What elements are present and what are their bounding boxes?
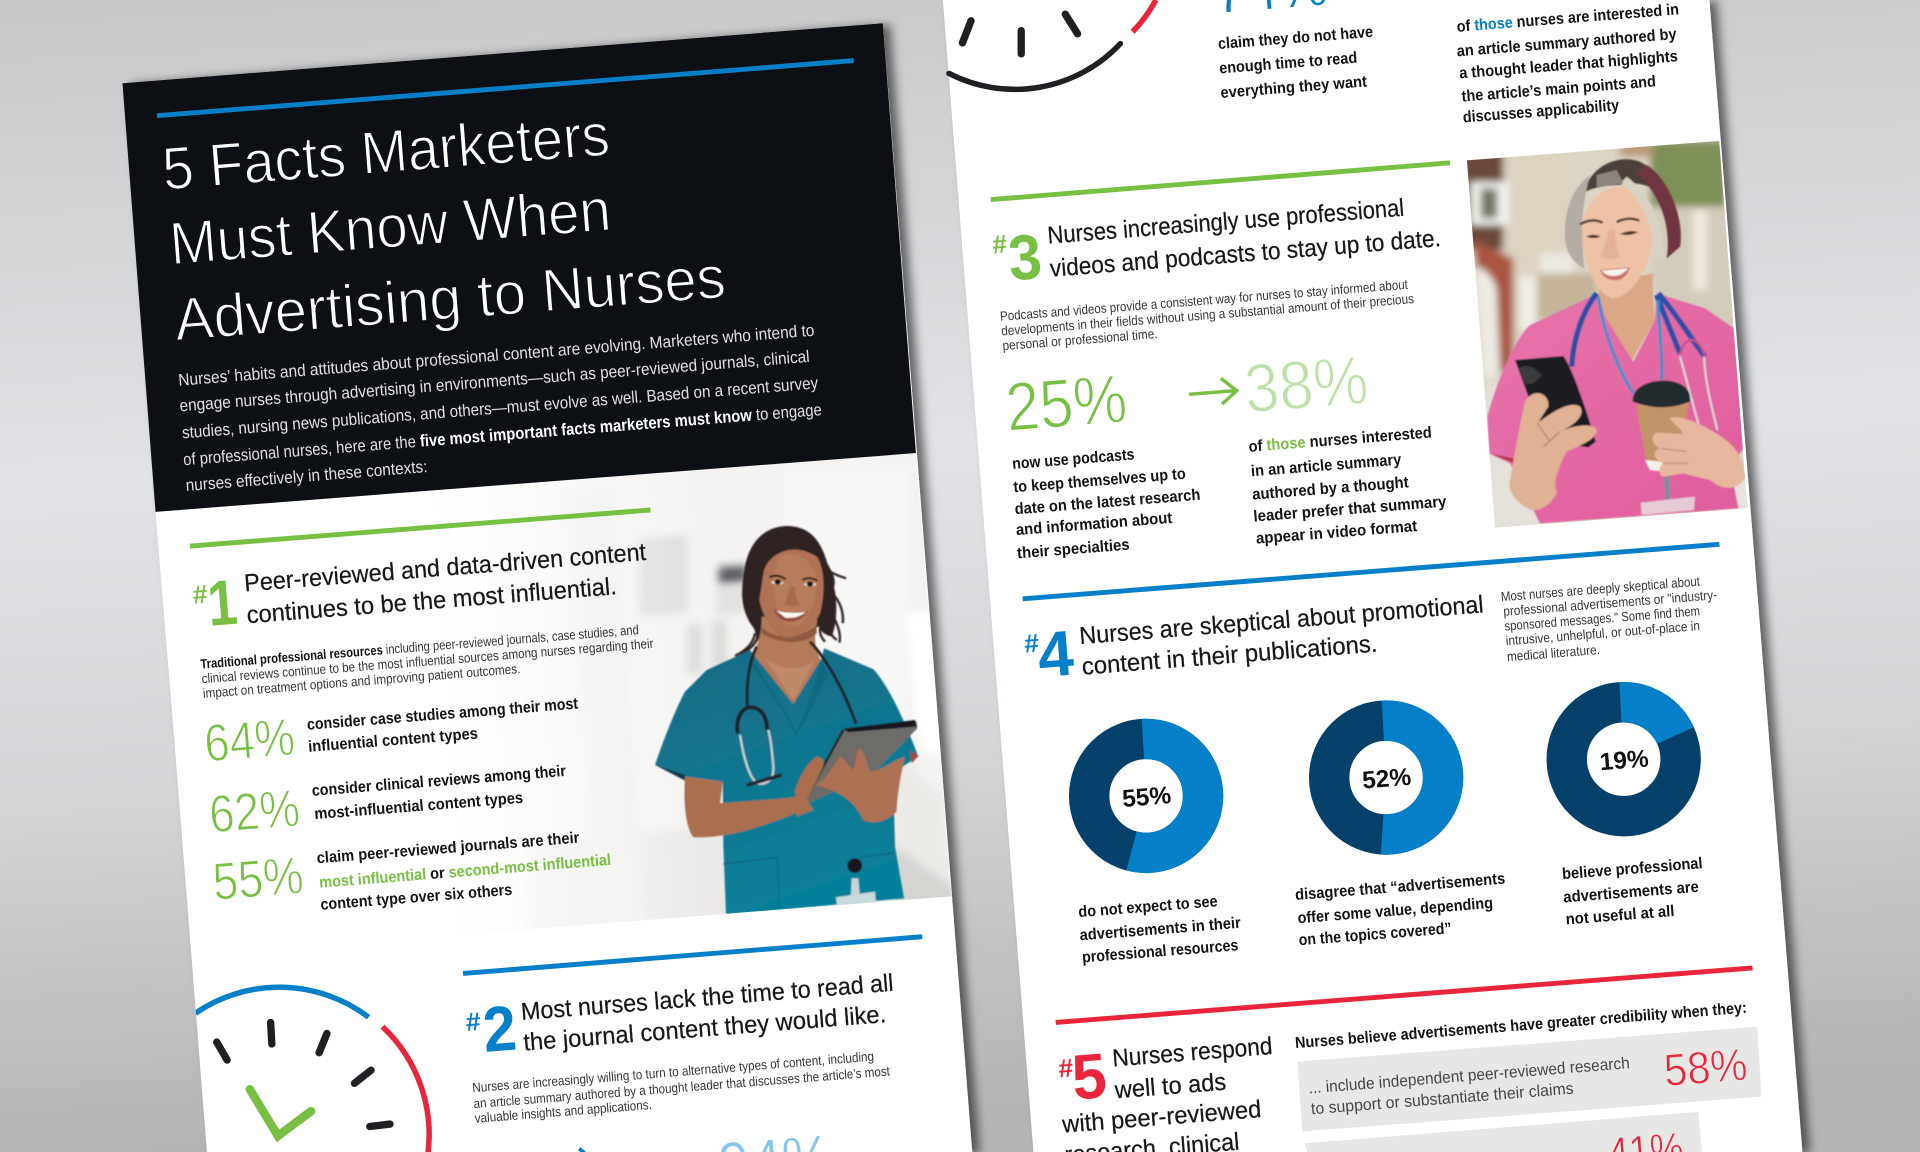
number badge: #: [1023, 630, 1040, 659]
stat: 62%: most-influential content types: [314, 790, 524, 823]
intro paragraph: Nurses’ habits and attitudes about professional content are evolving. Marketers who intend to: [178, 321, 815, 390]
accent line: [157, 58, 854, 118]
stat caption left: claim they do not have: [1217, 24, 1374, 53]
stat: 55%: claim peer-reviewed journals are their: [316, 830, 580, 867]
panel: dark intro header: [122, 23, 916, 512]
panel: fact 2: [195, 934, 922, 1152]
stat caption left: now use podcasts: [1012, 446, 1135, 473]
donut chart: 52%: [1326, 718, 1446, 837]
hallway photo background: [156, 453, 952, 929]
page sheet: [122, 23, 972, 1152]
stat caption right: leader prefer that summary: [1253, 493, 1447, 526]
side note: sponsored messages." Some find them: [1504, 603, 1700, 634]
title: Must Know When: [167, 176, 613, 277]
body text: Traditional professional resources including peer-reviewed journals, case studies, and: [200, 622, 639, 672]
section rule: [1022, 542, 1720, 601]
donut caption 2: [1294, 871, 1506, 949]
stat caption right: [1456, 1, 1680, 126]
heading: Peer-reviewed and data-driven content: [243, 539, 647, 597]
heading: the journal content they would like.: [522, 1001, 887, 1057]
body text: [999, 277, 1415, 353]
intro paragraph: [178, 321, 822, 495]
donut caption 1: [1078, 893, 1241, 966]
number badge: 3: [1006, 221, 1044, 294]
street backdrop: [1467, 141, 1748, 528]
number badge: 2: [480, 992, 519, 1066]
heading: [1047, 195, 1442, 283]
callout: 58%: [1297, 1027, 1762, 1131]
arrow: [1189, 378, 1237, 404]
panel: fact 4: [1022, 542, 1720, 966]
arrow: [578, 1147, 586, 1152]
body text: developments in their fields without using a substantial amount of their precious: [1001, 291, 1415, 339]
photo: smiling nurse in teal scrubs: [655, 526, 918, 915]
stat caption left: enough time to read: [1219, 50, 1358, 77]
stat: 55%: [211, 830, 612, 914]
heading: Nurses increasingly use professional: [1047, 195, 1405, 250]
side note: professional advertisements or "industry-: [1503, 587, 1718, 619]
heading: [1060, 1033, 1273, 1152]
panel: fact 5: [1056, 966, 1762, 1152]
number badge: #: [1057, 1054, 1074, 1084]
donut chart: 55%: [1086, 736, 1206, 856]
side note: medical literature.: [1506, 642, 1600, 664]
donut chart: 19%: 19%: [1599, 745, 1650, 776]
body text: an article summary authored by a thought leader that discusses the article’s most: [473, 1063, 891, 1111]
hair: [1586, 158, 1650, 192]
stat caption right: authored by a thought: [1252, 474, 1410, 504]
panel: fact 3: [991, 130, 1767, 562]
donut caption 3: [1561, 855, 1703, 928]
heading: videos and podcasts to stay up to date.: [1049, 225, 1442, 283]
body text: [200, 622, 654, 701]
stat caption right: [1248, 424, 1447, 548]
panel: fact 1: [190, 508, 654, 914]
body text: valuable insights and applications.: [474, 1097, 652, 1126]
donut caption 2: on the topics covered”: [1298, 920, 1452, 949]
page sheet: [943, 0, 1802, 1152]
panel: right page: [943, 0, 1802, 1152]
stat: 62%: 62%: [207, 779, 302, 845]
stat: 55%: most influential or second-most influential: [319, 852, 612, 892]
title: Advertising to Nurses: [172, 243, 728, 353]
section rule: [190, 508, 651, 549]
donut caption 2: offer some value, depending: [1297, 895, 1494, 927]
body text: Nurses are increasingly willing to turn to alternative types of content, including: [472, 1049, 875, 1095]
donut caption 2: disagree that “advertisements: [1294, 871, 1506, 904]
stat caption right: an article summary authored by: [1456, 26, 1677, 60]
icon: clock continuation: [949, 0, 1156, 89]
heading: [1078, 591, 1485, 681]
stat caption right: in an article summary: [1250, 452, 1402, 480]
heading: with peer-reviewed: [1060, 1096, 1262, 1139]
phone hand: [1509, 393, 1597, 510]
stat: 62%: consider clinical reviews among their: [311, 763, 566, 800]
donut caption 3: advertisements are: [1563, 879, 1700, 906]
stat caption left: [1012, 446, 1201, 562]
stat caption right: discusses applicability: [1462, 97, 1620, 126]
stat: 64%: [202, 695, 579, 774]
stat caption left: to keep themselves up to: [1013, 466, 1187, 496]
stat: 55%: content type over six others: [320, 882, 513, 914]
number badge: 5: [1069, 1040, 1109, 1114]
stat caption right: the article’s main points and: [1461, 73, 1656, 106]
body text: [472, 1049, 891, 1126]
heading: continues to be the most influential.: [246, 573, 618, 629]
number badge: #: [465, 1008, 482, 1037]
stat caption right: a thought leader that highlights: [1459, 48, 1679, 82]
stat: 25%: 25%: [1003, 360, 1130, 446]
donut caption 1: professional resources: [1081, 937, 1239, 966]
coffee cup: [1636, 403, 1688, 465]
number badge: 4: [1035, 617, 1077, 691]
intro paragraph: engage nurses through advertising in environments—such as peer-reviewed journals, clinical: [179, 347, 810, 415]
side note: [1500, 574, 1718, 664]
heading: [520, 970, 894, 1057]
heading: Nurses are skeptical about promotional: [1078, 591, 1485, 650]
stat: 62%: [207, 763, 566, 845]
stat caption left: date on the latest research: [1014, 487, 1201, 518]
pink scrubs: [1487, 293, 1743, 523]
callout: 58%: ... include independent peer-reviewed research: [1308, 1054, 1630, 1097]
callout: 58%: to support or substantiate their claims: [1310, 1080, 1574, 1118]
heading: Nurses respond: [1111, 1033, 1273, 1073]
number badge: [1059, 1054, 1106, 1099]
heading: Most nurses lack the time to read all: [520, 970, 894, 1026]
donut chart: 55%: 55%: [1121, 782, 1172, 813]
intro paragraph: studies, nursing news publications, and others—must evolve as well. Based on a recent survey: [181, 373, 819, 442]
stat caption right: of those nurses interested: [1248, 424, 1432, 456]
donut chart: 19%: [1564, 699, 1684, 819]
neck and face: [1598, 273, 1655, 363]
donut chart: 52%: 52%: [1361, 764, 1412, 795]
heading: content in their publications.: [1081, 631, 1378, 681]
stat caption left: and information about: [1015, 510, 1174, 539]
donut caption 3: not useful at all: [1565, 903, 1675, 928]
section rule: [1056, 966, 1753, 1025]
body text: Podcasts and videos provide a consistent way for nurses to stay informed about: [999, 277, 1409, 324]
intro paragraph: of professional nurses, here are the five most important facts marketers must know to engage: [182, 400, 822, 469]
stat caption right: of those nurses are interested in: [1456, 1, 1680, 36]
stat caption right: appear in video format: [1255, 518, 1418, 548]
section rule: [463, 934, 922, 976]
number badge: 1: [205, 567, 240, 640]
stat: fact 2 continued: [1211, 0, 1680, 126]
stat: 38%: 38%: [1242, 341, 1371, 428]
title: [160, 101, 728, 353]
stat: 64%: influential content types: [308, 726, 479, 756]
icon: clock: [195, 987, 429, 1152]
stat: 55%: 55%: [211, 846, 306, 912]
donut caption 1: do not expect to see: [1078, 893, 1218, 921]
stat caption left: their specialties: [1017, 537, 1130, 562]
photo: nurse in pink scrubs with phone and coffee: [1467, 141, 1748, 528]
title: 5 Facts Marketers: [160, 101, 612, 203]
body text: impact on treatment options and improving patient outcomes.: [202, 661, 521, 701]
stat caption left: everything they want: [1220, 73, 1368, 102]
stat: 64%: consider case studies among their most: [306, 695, 579, 734]
donut caption 3: believe professional: [1561, 855, 1703, 883]
number badge: [466, 1006, 516, 1052]
donut caption 1: advertisements in their: [1079, 915, 1241, 944]
side note: intrusive, unhelpful, or out-of-place in: [1505, 618, 1700, 648]
phone: [1515, 356, 1596, 447]
cup hand: [1653, 417, 1745, 488]
body text: clinical reviews continue to be the most influential sources among nurses regarding their: [201, 636, 654, 686]
section rule: [991, 160, 1450, 202]
lanyard badge: [1664, 477, 1670, 500]
callout: 41%: [1305, 1112, 1702, 1152]
callout: 58%: 58%: [1662, 1039, 1749, 1096]
number badge: #: [991, 230, 1008, 259]
number badge: [192, 567, 240, 640]
dark block: [122, 23, 916, 512]
stat caption left: [1217, 24, 1374, 102]
number badge: [991, 221, 1044, 294]
stat: 64%: 64%: [202, 708, 297, 774]
side note: Most nurses are deeply skeptical about: [1500, 574, 1701, 604]
heading: [243, 539, 647, 629]
number badge: #: [192, 581, 209, 610]
intro paragraph: nurses effectively in these contexts:: [185, 457, 428, 495]
body text: personal or professional time.: [1002, 326, 1158, 353]
heading: well to ads: [1113, 1069, 1227, 1104]
credibility heading: Nurses believe advertisements have greater credibility when they:: [1294, 1000, 1747, 1052]
